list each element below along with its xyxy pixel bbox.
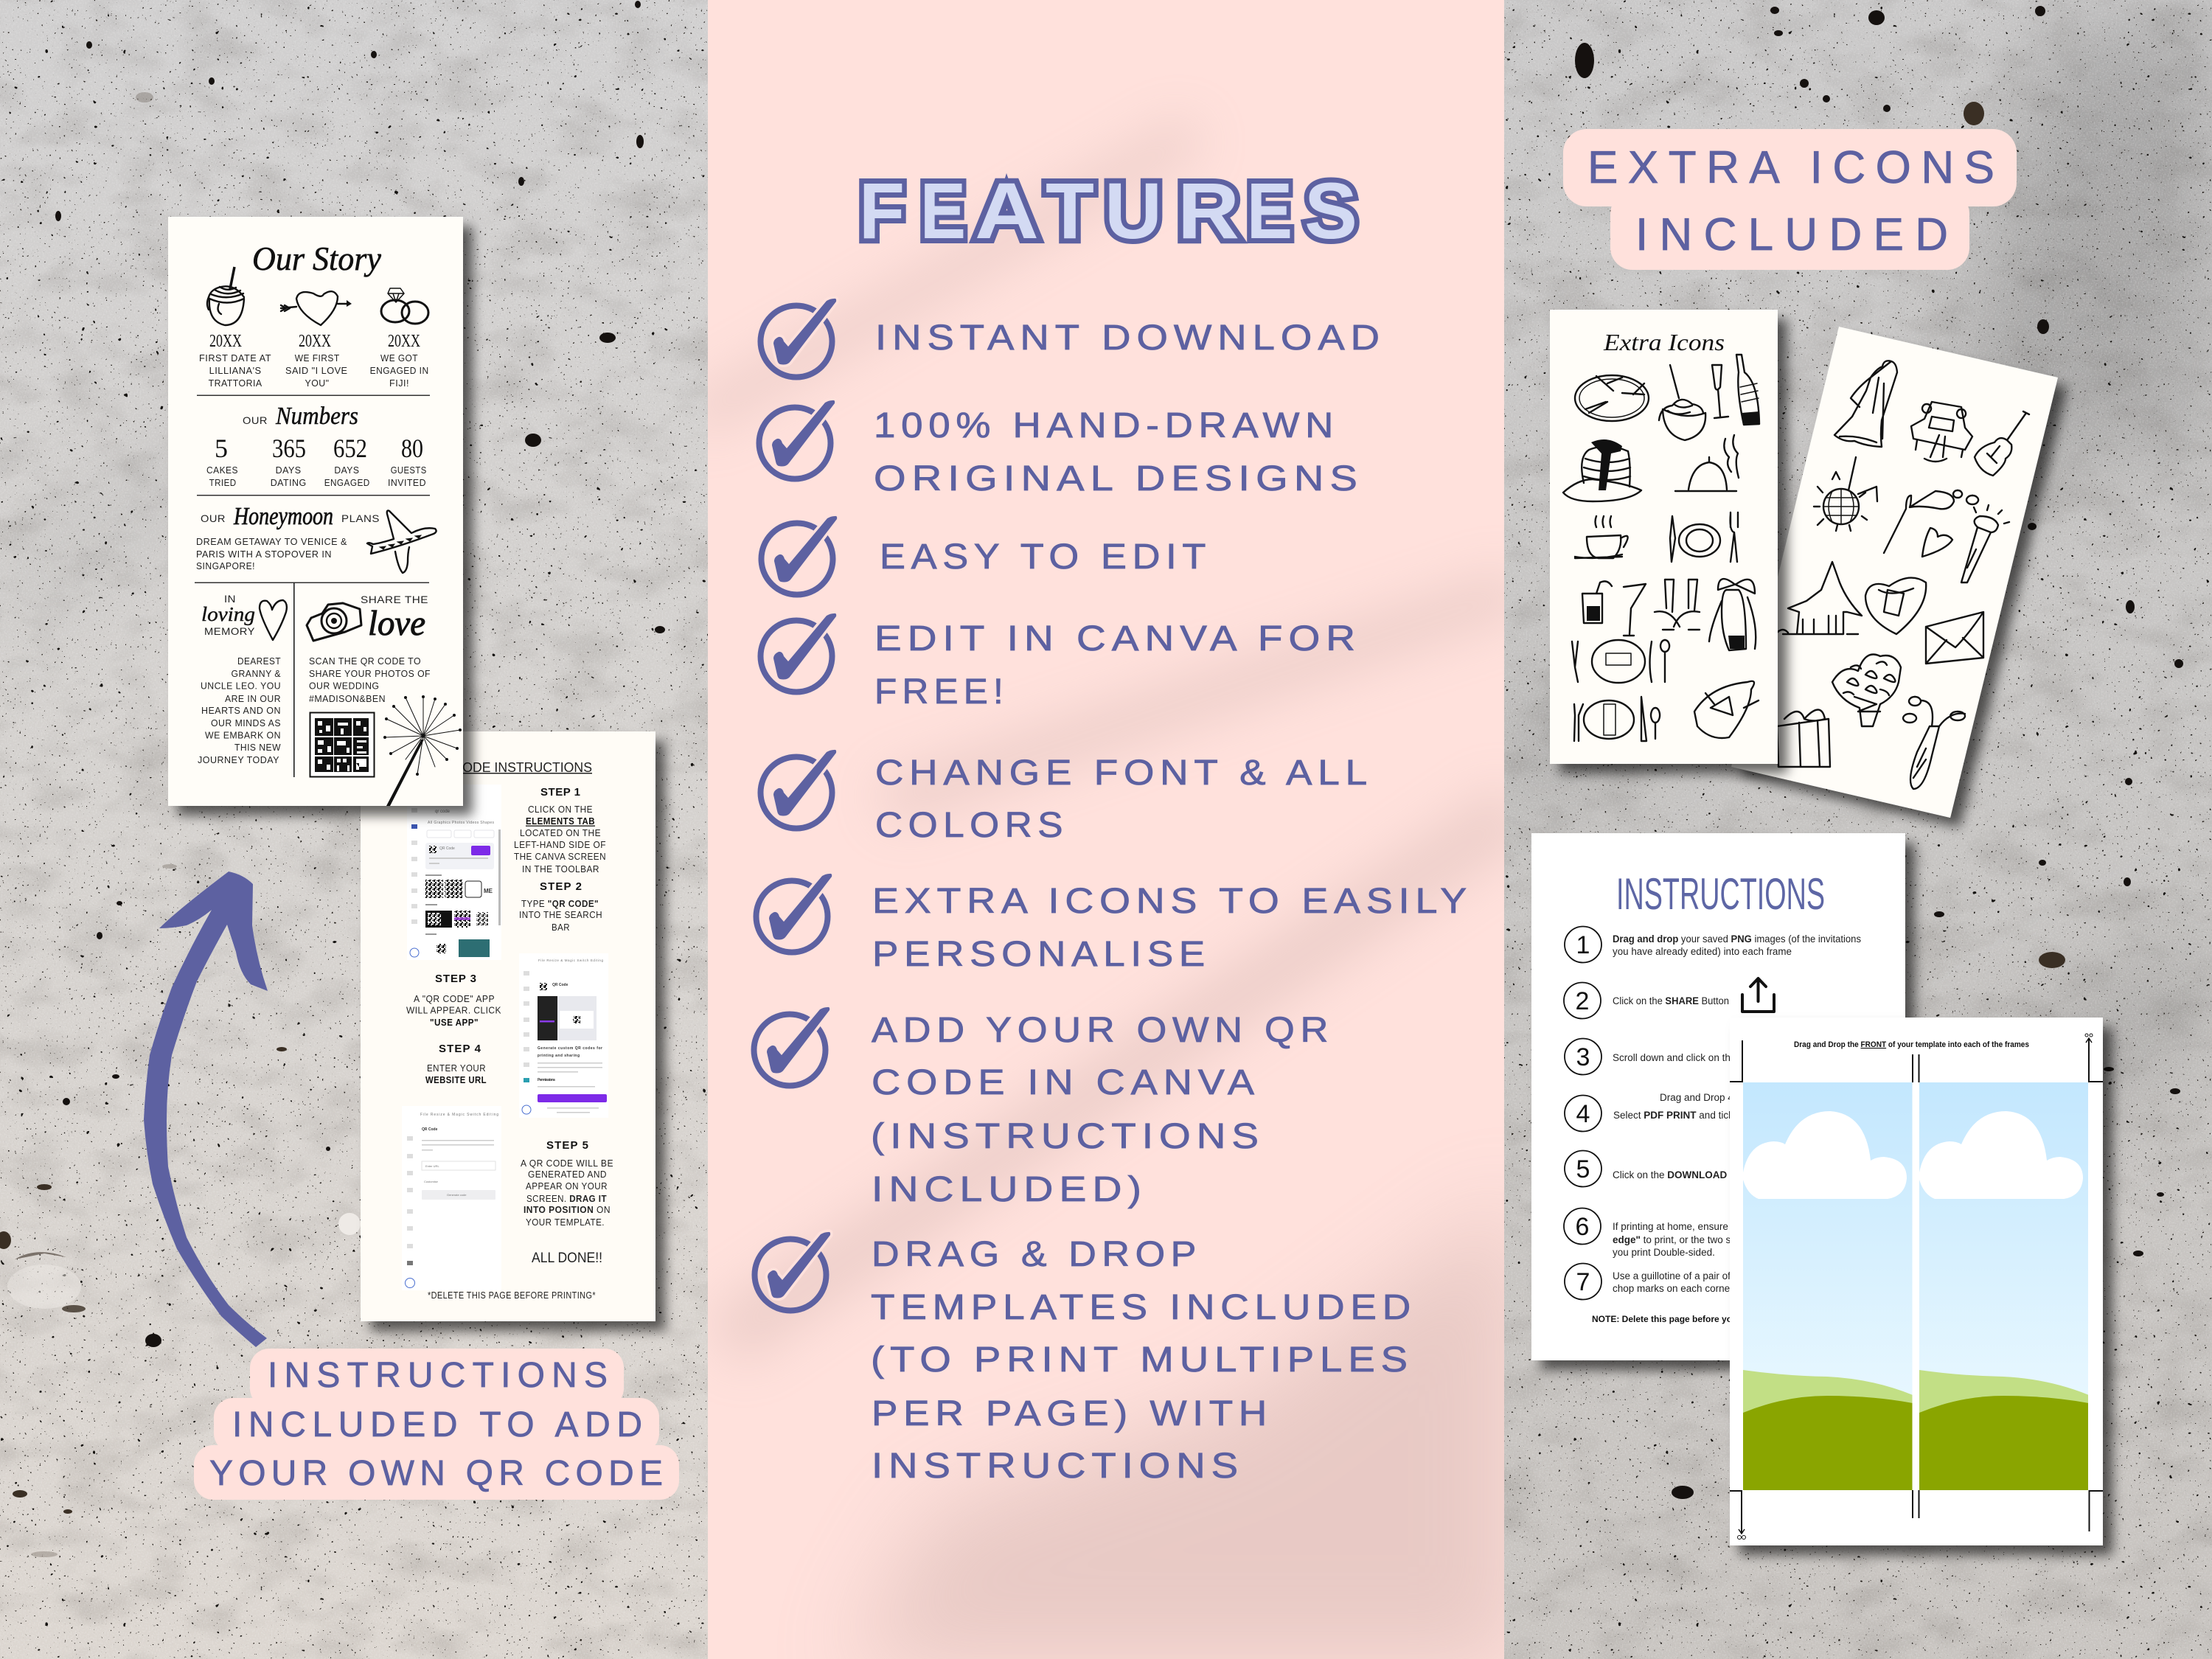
step one: you have already edited) into each frame [1613, 946, 1792, 957]
steps 1 and 2 [514, 786, 606, 933]
steps 1 and 2: STEP 2 [540, 880, 582, 893]
panel: features [693, 0, 1519, 1659]
steps 1 and 2: LOCATED ON THE [520, 827, 601, 838]
icon: cloche [1675, 435, 1739, 491]
step five: 5 [1576, 1155, 1590, 1183]
screenshot: enter URL: File Resize & Magic Switch Editing [420, 1113, 498, 1117]
screenshot: QR code app [519, 953, 608, 1118]
feature: drag and drop templates: DRAG & DROP [872, 1235, 1202, 1274]
icon: sparkler [383, 695, 462, 806]
feature: drag and drop templates: PER PAGE) WITH [872, 1394, 1273, 1433]
share the love: love [368, 604, 425, 643]
our numbers: TRIED [209, 477, 237, 488]
card: QR code instructions [361, 731, 655, 1321]
card: instructions [1531, 833, 1905, 1360]
label pill: instructions: INSTRUCTIONS [268, 1356, 608, 1395]
feature: instant download [761, 299, 1385, 378]
in loving memory: IN [224, 593, 236, 605]
steps 1 and 2: STEP 1 [540, 786, 580, 799]
our numbers: 80 [401, 434, 423, 463]
steps 3 and 4: WEBSITE URL [425, 1074, 487, 1085]
icon: chapel [1777, 562, 1862, 634]
icon: plated setting [1572, 640, 1669, 683]
feature: add QR code: (INSTRUCTIONS [871, 1117, 1265, 1156]
step three: Scroll down and click on th [1613, 1052, 1731, 1063]
feature: hand-drawn designs: 100% HAND-DRAWN [874, 406, 1339, 445]
feature: drag and drop templates: TEMPLATES INCLUDED [871, 1288, 1416, 1327]
feature: easy to edit [761, 516, 1211, 594]
icon: envelope [1926, 612, 1983, 664]
label pill: instructions: INCLUDED TO ADD [232, 1405, 642, 1444]
icon: plate with menu [1574, 697, 1660, 741]
steps 1 and 2: ELEMENTS TAB [526, 815, 595, 827]
share the love: SHARE THE [361, 594, 428, 605]
heading: INSTRUCTIONS: INSTRUCTIONS [1616, 869, 1825, 919]
step seven [1565, 1264, 1733, 1299]
honeymoon plans: DREAM GETAWAY TO VENICE & [196, 536, 347, 547]
steps 3 and 4: A "QR CODE" APP [414, 993, 495, 1004]
screenshot: QR code app: printing and sharing [538, 1054, 580, 1058]
label pill: extra icons: EXTRA ICONS [1587, 142, 1994, 193]
screenshot: QR code app: Permissions [538, 1078, 555, 1082]
icon: pizza [1575, 375, 1649, 421]
hills [1919, 1370, 2089, 1490]
feature: edit in canva: FREE! [874, 672, 1009, 712]
icon: heart [1922, 528, 1952, 557]
step one: 1 [1576, 931, 1590, 959]
in loving memory: ARE IN OUR [225, 693, 281, 704]
our numbers: DAYS [276, 465, 302, 476]
screenshot: enter URL [402, 1106, 501, 1290]
feature: easy to edit: EASY TO EDIT [880, 538, 1211, 577]
cloud [1743, 1111, 1907, 1199]
screenshot: QR code app: Generate custom QR codes for [538, 1046, 602, 1051]
icon: disco ball [1814, 457, 1877, 531]
our numbers: GUESTS [391, 465, 427, 476]
step six: edge" to print, or the two s [1613, 1234, 1731, 1245]
label pill: instructions [194, 1349, 679, 1500]
step six: 6 [1576, 1213, 1589, 1241]
feature: drag and drop templates: INSTRUCTIONS [872, 1447, 1244, 1486]
step seven: chop marks on each corner [1613, 1283, 1733, 1294]
timeline dates and captions: 20XX [209, 332, 242, 351]
feature: hand-drawn designs: ORIGINAL DESIGNS [874, 459, 1363, 498]
icon: wine bottle [1736, 355, 1759, 425]
icon: cheese board [1694, 681, 1759, 738]
feature: change font and colors: CHANGE FONT & ALL [875, 754, 1373, 793]
honeymoon plans: PARIS WITH A STOPOVER IN [196, 549, 332, 560]
our numbers: 652 [333, 434, 367, 463]
timeline dates and captions: 20XX [299, 332, 331, 351]
heading: FEATURES: U [1105, 166, 1162, 255]
icon: bubble wand [1884, 490, 1978, 553]
in loving memory: JOURNEY TODAY [198, 754, 279, 765]
icon: champagne flute [1712, 365, 1728, 418]
screenshot: elements tab: ME [484, 888, 493, 894]
feature: hand-drawn designs [759, 400, 1363, 498]
step four: Drag and Drop 4 [1660, 1092, 1733, 1103]
crop marks [1730, 1034, 2103, 1540]
feature: extra icons [757, 874, 1472, 974]
icon: wedding car [1911, 402, 1972, 462]
icon: bottle with ribbon [1709, 579, 1756, 650]
share the love: SCAN THE QR CODE TO [309, 655, 421, 667]
timeline dates and captions: TRATTORIA [209, 378, 262, 389]
screenshot: enter URL: Enter URL [425, 1164, 439, 1168]
step four [1565, 1092, 1733, 1131]
heading: FEATURES: T [1046, 166, 1094, 255]
template caption: Drag and Drop the FRONT of your template into each of the frames [1794, 1040, 2029, 1049]
card: drag and drop template [1730, 1018, 2103, 1545]
timeline dates and captions: 20XX [388, 332, 420, 351]
note: NOTE: Delete this page before you save [1592, 1314, 1760, 1324]
our numbers: ENGAGED [324, 477, 370, 488]
icon: coffee cup [1575, 516, 1628, 558]
step 5: INTO POSITION ON [524, 1204, 611, 1215]
card: extra icons sheet two [1731, 327, 2058, 818]
step seven: 7 [1576, 1268, 1590, 1296]
step two [1564, 982, 1729, 1019]
step seven: Use a guillotine of a pair of [1613, 1270, 1731, 1281]
label pill: extra icons [1563, 129, 2017, 270]
screenshot: enter URL: QR Code [422, 1127, 438, 1132]
our numbers: OUR [243, 414, 268, 426]
icon: bouquet [1832, 655, 1901, 726]
our numbers: CAKES [206, 465, 238, 476]
step 5: ALL DONE!! [532, 1251, 602, 1266]
honeymoon plans: SINGAPORE! [196, 560, 255, 571]
step 5: APPEAR ON YOUR [526, 1180, 608, 1192]
screenshot: elements tab: QR Code [439, 846, 455, 851]
our numbers: DAYS [334, 465, 359, 476]
icon: vase with flowers [1903, 697, 1965, 789]
timeline dates and captions [199, 332, 429, 389]
heading: FEATURES: A [975, 166, 1039, 255]
frame one [1743, 1082, 1913, 1490]
steps 1 and 2: BAR [552, 922, 570, 933]
in loving memory: OUR MINDS AS [211, 717, 281, 728]
heading: FEATURES: F [859, 166, 905, 255]
feature: add QR code: ADD YOUR OWN QR [872, 1011, 1334, 1050]
step three: 3 [1576, 1043, 1590, 1071]
in loving memory: HEARTS AND ON [201, 705, 281, 716]
feature: add QR code: INCLUDED) [872, 1170, 1147, 1209]
feature: edit in canva: EDIT IN CANVA FOR [874, 619, 1361, 658]
screenshot: enter URL: Generate code [447, 1193, 467, 1197]
title: Extra Icons: Extra Icons [1603, 329, 1725, 355]
step 5 [521, 1139, 613, 1266]
icon: martini [1624, 584, 1646, 636]
arrow [144, 872, 268, 1347]
in loving memory: MEMORY [204, 625, 255, 637]
icon: plane [367, 510, 437, 573]
feature: drag and drop templates: (TO PRINT MULTIPLES [871, 1340, 1413, 1380]
step 5: SCREEN. DRAG IT [526, 1193, 607, 1204]
screenshot: elements tab: qr code [435, 810, 451, 814]
step three [1565, 1038, 1731, 1075]
timeline dates and captions: SAID "I LOVE [285, 365, 348, 376]
steps 1 and 2: CLICK ON THE [528, 804, 593, 815]
screenshot: QR code app: File Resize & Magic Switch Editing [538, 959, 603, 962]
step 5: GENERATED AND [528, 1169, 607, 1180]
step four: 4 [1576, 1100, 1590, 1128]
heading: FEATURES: R [1178, 166, 1239, 255]
steps 1 and 2: LEFT-HAND SIDE OF [514, 839, 606, 850]
timeline dates and captions: FIRST DATE AT [199, 352, 271, 364]
card title: QR CODE INSTRUCTIONS [430, 760, 592, 775]
feature: change font and colors: COLORS [875, 806, 1068, 845]
steps 1 and 2: TYPE "QR CODE" [521, 898, 599, 909]
steps 1 and 2: INTO THE SEARCH [519, 909, 602, 920]
steps 1 and 2: IN THE TOOLBAR [522, 863, 599, 874]
steps 3 and 4: STEP 3 [435, 973, 476, 985]
steps 3 and 4: WILL APPEAR. CLICK [406, 1004, 501, 1016]
step six: you print Double-sided. [1613, 1247, 1715, 1258]
timeline dates and captions: ENGAGED IN [370, 365, 429, 376]
step five: Click on the DOWNLOAD B [1613, 1169, 1737, 1180]
cloud [1919, 1111, 2083, 1199]
feature: extra icons: PERSONALISE [872, 935, 1211, 974]
our numbers [206, 403, 427, 488]
icon: camera [307, 603, 361, 641]
heading: FEATURES [859, 166, 1357, 255]
step two: Click on the SHARE Button [1613, 995, 1729, 1006]
feature: edit in canva [761, 613, 1361, 712]
timeline dates and captions: LILLIANA'S [209, 365, 262, 376]
label pill: instructions: YOUR OWN QR CODE [209, 1454, 663, 1493]
share the love [309, 594, 431, 704]
icon: guitar [1975, 411, 2029, 476]
screenshot: elements tab [407, 785, 501, 960]
icon: gift [1777, 709, 1830, 767]
screenshot: QR code app: QR Code [552, 983, 568, 987]
card: extra icons sheet one [1550, 310, 1778, 764]
step four: Select PDF PRINT and tick [1613, 1110, 1733, 1121]
feature: add QR code [754, 1007, 1334, 1209]
screenshot: elements tab: All Graphics Photos Videos Shapes [428, 821, 494, 825]
in loving memory: UNCLE LEO. YOU [201, 680, 281, 692]
step two: 2 [1576, 987, 1589, 1015]
our numbers: 365 [272, 434, 306, 463]
our numbers: Numbers [275, 403, 358, 430]
share the love: SHARE YOUR PHOTOS OF [309, 668, 431, 679]
icon: pasta bowl [207, 267, 244, 325]
heading: FEATURES: S [1304, 166, 1357, 255]
icon: heart with arrow [281, 291, 352, 325]
delete note: *DELETE THIS PAGE BEFORE PRINTING* [428, 1290, 596, 1301]
our numbers: DATING [271, 477, 307, 488]
honeymoon plans: OUR [201, 512, 226, 524]
step 5: YOUR TEMPLATE. [526, 1217, 605, 1228]
in loving memory: WE EMBARK ON [205, 730, 281, 740]
timeline dates and captions: WE FIRST [295, 352, 340, 364]
title: Our Story: Our Story [252, 240, 382, 277]
share the love: #MADISON&BEN [309, 693, 386, 704]
icon: toasting flutes [1655, 580, 1700, 630]
in loving memory: THIS NEW [234, 742, 281, 753]
timeline dates and captions: YOU" [305, 378, 329, 389]
feature: instant download: INSTANT DOWNLOAD [875, 319, 1385, 358]
icon: pasta bowl [1659, 365, 1705, 440]
steps 1 and 2: THE CANVA SCREEN [514, 851, 606, 862]
share the love: OUR WEDDING [309, 680, 379, 692]
honeymoon plans [196, 503, 380, 571]
steps 3 and 4: ENTER YOUR [427, 1062, 486, 1074]
QR code [310, 712, 375, 777]
steps 3 and 4: STEP 4 [439, 1043, 481, 1055]
in loving memory [198, 593, 287, 765]
screenshot: enter URL: Customise [424, 1180, 439, 1183]
icon: place setting [1670, 512, 1738, 562]
step six: If printing at home, ensure [1613, 1221, 1728, 1232]
icon: bride and groom [1834, 361, 1897, 447]
steps 3 and 4: "USE APP" [430, 1017, 479, 1028]
step 5: A QR CODE WILL BE [521, 1158, 613, 1169]
in loving memory: loving [201, 603, 255, 625]
heading: FEATURES: E [920, 166, 966, 255]
frame two [1919, 1082, 2089, 1490]
label pill: extra icons: INCLUDED [1635, 209, 1948, 260]
honeymoon plans: Honeymoon [233, 503, 333, 530]
step one: Drag and drop your saved PNG images (of the invitations [1613, 933, 1861, 945]
step 5: STEP 5 [546, 1139, 588, 1152]
icon: share [1742, 978, 1774, 1012]
card: our story [168, 217, 463, 806]
hills [1743, 1370, 1913, 1490]
step five [1565, 1150, 1737, 1187]
our numbers: INVITED [388, 477, 426, 488]
steps 3 and 4 [406, 973, 501, 1085]
icon: microphone [1961, 505, 2009, 582]
heading: FEATURES: E [1247, 166, 1293, 255]
feature: add QR code: CODE IN CANVA [872, 1063, 1260, 1102]
feature: extra icons: EXTRA ICONS TO EASILY [872, 882, 1472, 921]
feature: change font and colors [761, 750, 1373, 845]
timeline dates and captions: WE GOT [380, 352, 418, 364]
step one [1565, 926, 1861, 963]
icon: cocktail [1582, 581, 1612, 623]
icon: pancakes [1563, 439, 1641, 501]
icon: rings [381, 288, 428, 324]
step six [1564, 1208, 1731, 1258]
in loving memory: DEAREST [237, 655, 281, 667]
timeline dates and captions: FIJI! [389, 378, 409, 389]
icon: heart and bell [1865, 578, 1926, 634]
our numbers: 5 [215, 434, 228, 463]
feature: drag and drop templates [755, 1232, 1416, 1486]
honeymoon plans: PLANS [341, 512, 380, 524]
in loving memory: GRANNY & [232, 668, 281, 679]
